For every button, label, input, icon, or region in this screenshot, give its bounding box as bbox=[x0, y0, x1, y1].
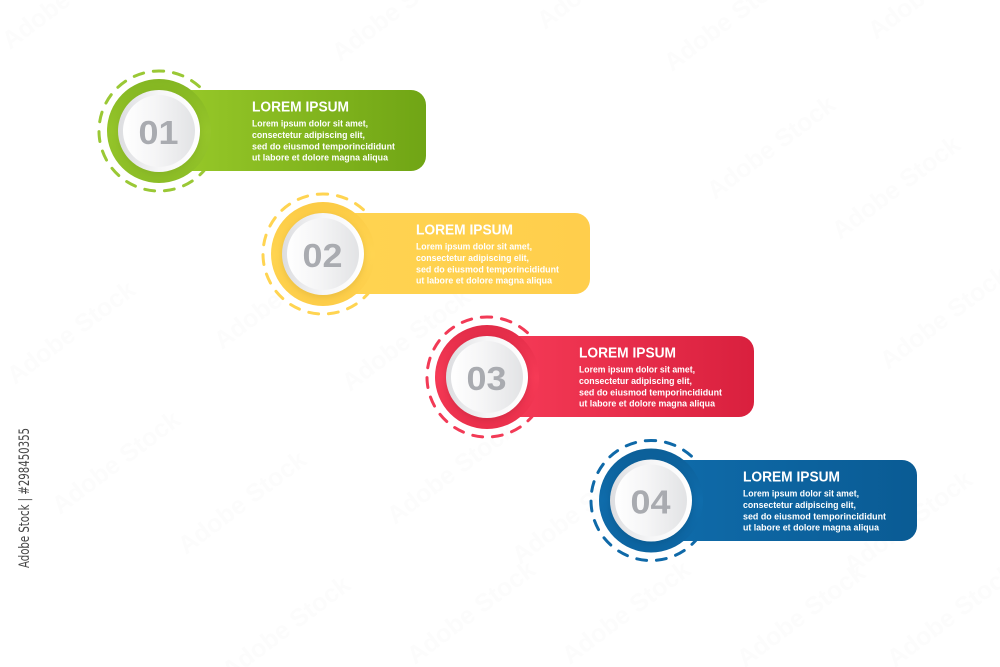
body text: ut labore et dolore magna aliqua bbox=[579, 398, 716, 410]
body text bbox=[416, 242, 560, 286]
number: 01 bbox=[138, 114, 178, 151]
badge circle bbox=[271, 202, 375, 306]
number disc bbox=[609, 460, 693, 544]
watermark pattern: Adobe Stock bbox=[209, 240, 348, 355]
body text: Lorem ipsum dolor sit amet, bbox=[416, 242, 532, 252]
number disc bbox=[117, 90, 201, 175]
body text: Lorem ipsum dolor sit amet, bbox=[252, 118, 368, 130]
body text bbox=[579, 364, 723, 410]
label bar bbox=[160, 90, 426, 171]
body text: ut labore et dolore magna aliqua bbox=[252, 152, 389, 164]
body text: ut labore et dolore magna aliqua bbox=[743, 522, 880, 534]
watermark pattern: Adobe Stock bbox=[173, 445, 312, 560]
dashed ring bbox=[258, 189, 388, 319]
step 01: green bbox=[94, 66, 426, 196]
body text: sed do eiusmod temporincididunt bbox=[743, 512, 887, 522]
dashed ring bbox=[94, 66, 224, 196]
number: 03 bbox=[466, 360, 506, 397]
badge circle bbox=[599, 448, 703, 552]
stock id caption: Adobe Stock | #298450355 bbox=[17, 428, 33, 568]
label bar bbox=[652, 460, 917, 541]
body text: Lorem ipsum dolor sit amet, bbox=[743, 488, 859, 500]
body text bbox=[252, 118, 396, 164]
watermark pattern: Adobe Stock bbox=[827, 130, 966, 245]
watermark pattern: Adobe Stock bbox=[557, 555, 696, 667]
label bar bbox=[324, 213, 590, 294]
dashed ring bbox=[586, 435, 716, 566]
number disc bbox=[445, 336, 529, 421]
heading: LOREM IPSUM bbox=[416, 222, 513, 238]
step 04: blue bbox=[586, 435, 917, 566]
body text: ut labore et dolore magna aliqua bbox=[416, 276, 553, 286]
badge circle bbox=[107, 79, 211, 183]
heading: LOREM IPSUM bbox=[579, 346, 676, 362]
step 02: yellow bbox=[258, 189, 590, 319]
number disc bbox=[281, 213, 365, 298]
number: 02 bbox=[302, 237, 342, 274]
body text bbox=[743, 488, 887, 534]
body text: sed do eiusmod temporincididunt bbox=[579, 388, 723, 398]
watermark pattern: Adobe Stock bbox=[337, 282, 476, 397]
body text: sed do eiusmod temporincididunt bbox=[252, 142, 396, 152]
label bar bbox=[488, 336, 754, 417]
watermark pattern: Adobe Stock bbox=[47, 405, 186, 520]
watermark pattern: Adobe Stock bbox=[702, 90, 841, 205]
body text: consectetur adipiscing elit, bbox=[579, 376, 692, 387]
body text: Lorem ipsum dolor sit amet, bbox=[579, 364, 695, 376]
step 03: red bbox=[422, 312, 754, 442]
watermark pattern: Adobe Stock bbox=[402, 555, 541, 667]
dashed ring bbox=[422, 312, 552, 442]
body text: consectetur adipiscing elit, bbox=[252, 130, 365, 141]
body text: consectetur adipiscing elit, bbox=[743, 500, 856, 511]
watermark pattern: Adobe Stock bbox=[507, 455, 646, 570]
heading: LOREM IPSUM bbox=[252, 100, 349, 116]
badge circle bbox=[435, 325, 539, 429]
number: 04 bbox=[630, 484, 671, 520]
heading: LOREM IPSUM bbox=[743, 470, 840, 486]
watermark pattern: Adobe Stock bbox=[382, 415, 521, 530]
watermark pattern: Adobe Stock bbox=[2, 275, 141, 390]
watermark pattern: Adobe Stock bbox=[839, 465, 978, 580]
body text: consectetur adipiscing elit, bbox=[416, 253, 529, 264]
body text: sed do eiusmod temporincididunt bbox=[416, 264, 560, 276]
